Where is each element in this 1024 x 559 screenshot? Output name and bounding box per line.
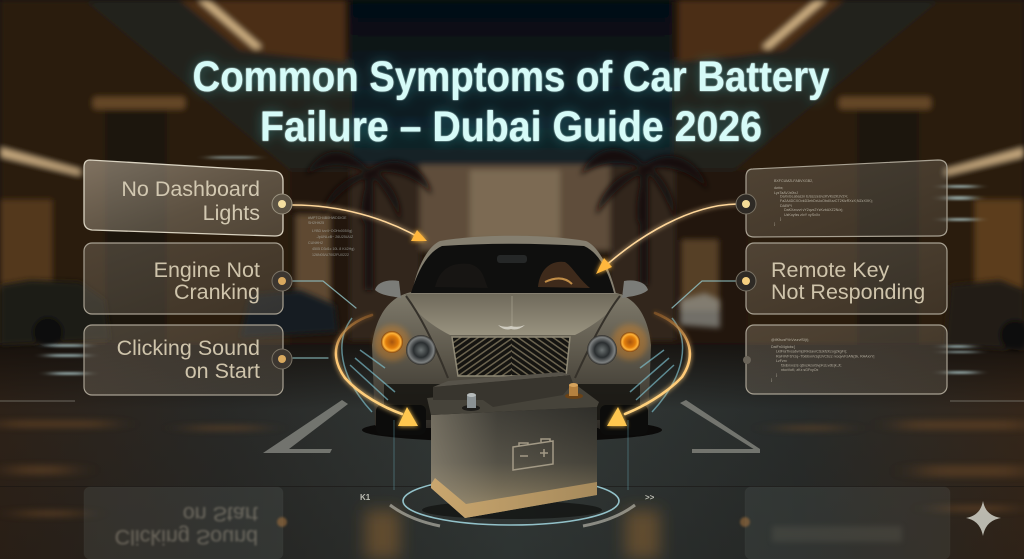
arrow: left sweep to battery — [336, 315, 418, 426]
small code text left: 4505 D3d1c 10L 8 K42Hg) — [312, 247, 354, 251]
node — [272, 349, 292, 369]
text: Engine Not Cranking — [154, 258, 260, 304]
amber headlight left — [374, 325, 410, 361]
HUD marks: >> — [645, 493, 655, 502]
text: Remote Key Not Responding: Not Responding — [771, 280, 925, 304]
code text: UzKoyfzs zIvY xySxXx — [784, 213, 820, 217]
code text: DaKXzvzvt vY2qvx2YzKzbAXZ2N/z); — [784, 208, 843, 212]
mirrors — [375, 280, 401, 298]
car battery — [422, 372, 602, 519]
text: Engine Not Cranking: Engine Not — [154, 258, 260, 282]
node — [272, 271, 292, 291]
code text: LktFraTlvsabvm|zRHzavrCSzkfzKzog2kgFr); — [776, 350, 847, 354]
text: Clicking Sound on Start — [117, 336, 260, 383]
node — [736, 271, 756, 291]
text: Clicking Sound on Start: Clicking Sound — [117, 336, 260, 360]
small code text left: LYBD tzv4~OOHx005Xg) — [312, 229, 352, 233]
battery top — [427, 384, 599, 415]
title — [192, 53, 830, 151]
code text: LyzTaAVJx0txJ — [774, 191, 798, 195]
negative terminal — [462, 393, 480, 411]
text: No Dashboard Lights: No Dashboard — [121, 177, 260, 201]
hood — [405, 294, 622, 335]
arrow: upper right to car — [596, 204, 737, 274]
battery base ring — [390, 477, 635, 526]
panel: Engine Not Cranking — [84, 243, 292, 314]
floor reflection: Clicking Sound panel: on Start — [183, 502, 258, 526]
panel: No Dashboard Lights — [84, 160, 292, 236]
small code text left: SH2HH25 — [308, 221, 324, 225]
arrow: dashboard lights to car — [293, 205, 427, 241]
code text — [771, 338, 875, 382]
battery lid — [433, 372, 573, 407]
text: Remote Key Not Responding — [771, 258, 925, 304]
grille — [452, 337, 570, 376]
amber headlight right — [612, 324, 648, 360]
icon: sparkle watermark — [966, 501, 1001, 536]
connector: clicking sound — [293, 357, 328, 359]
panel: Remote Key Not Responding — [736, 243, 947, 314]
battery base — [431, 478, 597, 518]
small code text left: .JpUNLcB~ 26U25UUZ — [316, 235, 354, 239]
arrow: right sweep to battery — [607, 313, 690, 426]
panel: code card lower right — [743, 325, 947, 394]
lower bumper — [384, 384, 640, 420]
code text: DatFn04gtobz{ — [771, 345, 796, 349]
code text: BXFCUMZLFABVXGB2, — [774, 179, 813, 183]
side floor lines — [0, 400, 75, 402]
title: Common Symptoms of Car Battery — [192, 53, 830, 101]
palms — [305, 149, 708, 290]
glowing arrows — [293, 204, 737, 426]
text: Engine Not Cranking: Cranking — [174, 280, 260, 304]
small code text left: 126N05/U7002FU0222 — [312, 253, 349, 257]
code text: } — [776, 373, 778, 377]
text: Clicking Sound on Start: on Start — [185, 359, 260, 383]
code text: DAEtPI — [780, 204, 792, 208]
code text: @IfKfsvzP.thVvurvfSI(t); — [771, 338, 809, 342]
node — [736, 194, 756, 214]
small code text left — [308, 216, 354, 257]
code text: } — [774, 222, 776, 226]
positive terminal — [565, 383, 583, 399]
battery icon — [513, 439, 553, 470]
parking lines — [263, 400, 760, 453]
small code text left: CUNHH2 — [308, 241, 323, 245]
code text: } — [780, 217, 782, 221]
floor reflection: Remote Key panel — [740, 487, 950, 559]
code text: ntovVoK; zKx sGFxyOx — [781, 368, 819, 372]
round lamps — [406, 335, 436, 365]
parked cars — [0, 280, 1024, 350]
tech overlay rings — [342, 318, 683, 490]
motion streaks — [48, 156, 975, 375]
title: Failure – Dubai Guide 2026 — [260, 103, 762, 151]
logo — [498, 325, 525, 330]
panel: code card upper right — [736, 160, 947, 237]
code text: RaFrIVFSYzq~TtxbbxnVzqtzVCbzz rxoqvvFzAN(3k, RAAxxY| — [776, 354, 875, 358]
car — [362, 236, 662, 442]
code text: f3xEnxxzrs qDxzAzorSvpKcLvdE(k,Jt; — [781, 364, 842, 368]
code text: dwbx; — [774, 186, 783, 190]
floor reflection: Clicking Sound panel — [84, 487, 287, 559]
connector: remote key — [672, 281, 737, 308]
code text: Fa2A4DCXOvkD3ehDxUoObdXzzCT2KlzRXzX;NZzXXK); — [780, 199, 873, 203]
connector: engine not cranking — [293, 281, 356, 308]
tyres — [376, 405, 426, 435]
small code text left: #MPTCH4B0HWDDIGE — [308, 216, 347, 220]
panel: Clicking Sound on Start — [84, 325, 292, 395]
code text: } — [771, 378, 773, 382]
text: No Dashboard Lights — [121, 177, 260, 225]
code text: DaXxGLabazzn E/sszzeUvzKVKs2KzVZ4; — [780, 194, 848, 198]
text: Remote Key Not Responding: Remote Key — [771, 258, 890, 282]
battery front and side — [431, 407, 597, 518]
code text: LzFzrx — [776, 359, 787, 363]
text: No Dashboard Lights: Lights — [203, 201, 260, 225]
car body — [372, 292, 651, 434]
node — [272, 194, 292, 214]
code text — [774, 179, 873, 226]
roof and windshield — [411, 236, 616, 294]
HUD marks: K1 — [360, 493, 371, 502]
floor reflection: Clicking Sound panel: Clicking Sound — [115, 525, 258, 549]
HUD marks — [360, 493, 655, 502]
